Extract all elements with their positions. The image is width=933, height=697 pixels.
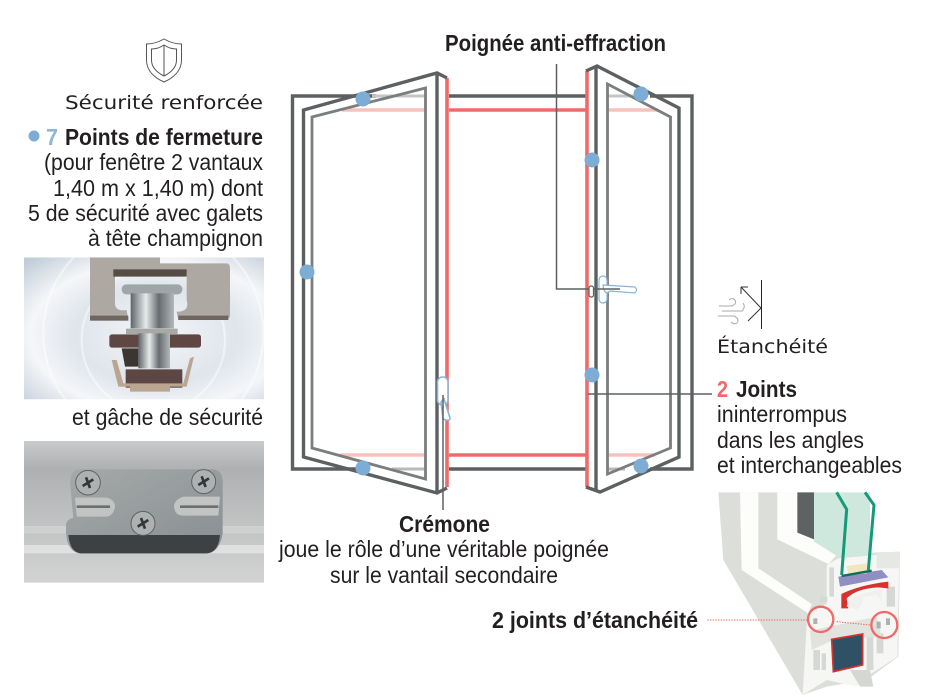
leader: crémone: [442, 395, 444, 510]
frame: dormant: [292, 96, 692, 469]
text block: points de fermeture: 7: [46, 124, 58, 150]
image: coupe du profilé: [707, 492, 900, 695]
diagram: fenêtre 2 vantaux: [292, 64, 712, 510]
text block: 2 joints: [717, 376, 902, 478]
gaskets: joints rouges: [340, 71, 658, 487]
points de fermeture: [300, 86, 648, 476]
panel: vantail droit: [586, 66, 679, 492]
text block: 2 joints: et interchangeables: [717, 452, 902, 478]
photo: galet à tête champignon: [24, 258, 264, 400]
leader: poignée: [556, 64, 620, 289]
text block: 2 joints: Joints: [736, 376, 797, 402]
text block: crémone: [278, 511, 609, 588]
label: 2 joints d'étanchéité: 2 joints d’étanchéité: [492, 607, 698, 633]
text block: points de fermeture: 5 de sécurité avec galets: [28, 200, 263, 226]
icon: shield: [146, 39, 182, 82]
heading: poignée anti-effraction: Poignée anti-effraction: [445, 30, 666, 56]
text block: points de fermeture: (pour fenêtre 2 vantaux: [44, 149, 263, 175]
text block: points de fermeture: [28, 124, 263, 251]
text block: points de fermeture: Points de fermeture: [65, 124, 263, 150]
text block: crémone: joue le rôle d’une véritable poignée: [278, 536, 609, 562]
icon: vent et barrière: [718, 280, 762, 329]
panel: vantail gauche: [304, 73, 447, 493]
caption: gâche de sécurité: et gâche de sécurité: [72, 404, 263, 430]
leader: joints: [588, 393, 712, 395]
text block: crémone: sur le vantail secondaire: [330, 562, 558, 588]
text block: points de fermeture: à tête champignon: [88, 225, 263, 251]
text block: points de fermeture: 1,40 m x 1,40 m) dont: [53, 175, 263, 201]
icon: poignée: [589, 276, 636, 303]
text block: crémone: Crémone: [399, 511, 490, 537]
text block: 2 joints: ininterrompus: [717, 401, 847, 427]
icon: crémone: [438, 377, 450, 420]
text block: 2 joints: dans les angles: [717, 427, 864, 453]
heading: étanchéité: Étanchéité: [717, 335, 828, 358]
photo: gâche de sécurité: [24, 441, 264, 583]
heading: sécurité renforcée: Sécurité renforcée: [65, 92, 263, 114]
text block: 2 joints: 2: [717, 376, 728, 402]
